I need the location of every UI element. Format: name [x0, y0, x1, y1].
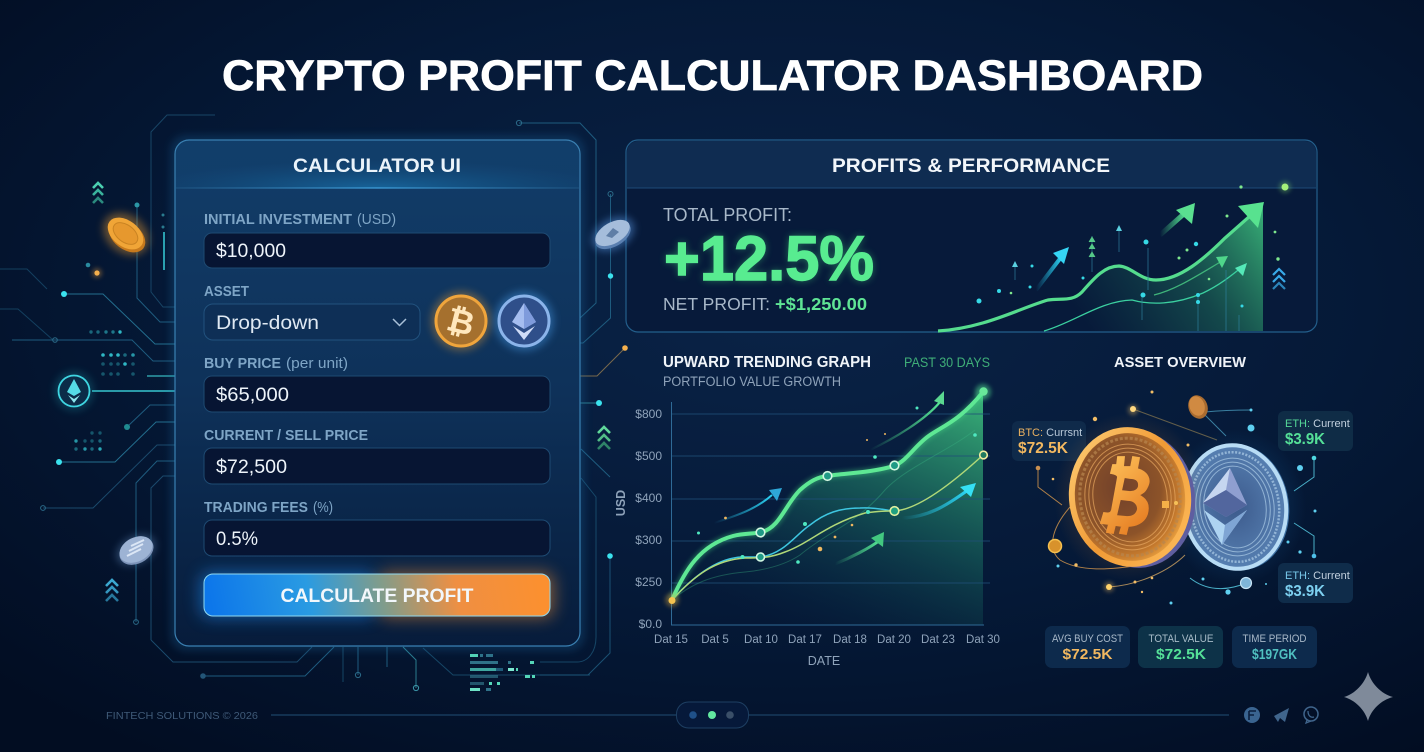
icon: small coin	[1185, 392, 1211, 422]
icon: large bitcoin coin	[1054, 413, 1206, 581]
x axis title: DATE	[808, 654, 840, 668]
field: buy price: (per unit)	[286, 356, 348, 372]
callout: BTC current	[1012, 421, 1086, 461]
x axis labels: Dat 23	[921, 634, 955, 646]
net profit: NET PROFIT:	[663, 294, 770, 314]
x axis labels: Dat 30	[966, 634, 1000, 646]
field: current / sell price: $72,500	[216, 457, 287, 478]
chart area fill	[672, 392, 983, 625]
stat card: total value: TOTAL VALUE	[1148, 633, 1214, 645]
panel header: calculator: CALCULATOR UI	[293, 155, 461, 177]
icon: bitcoin badge: ₿	[443, 300, 478, 343]
field: trading fees: (%)	[313, 500, 333, 516]
series: blue curve	[672, 508, 894, 600]
y axis labels: $0.0	[639, 617, 662, 631]
field: current / sell price: CURRENT / SELL PRICE	[204, 428, 368, 444]
net profit: +$1,250.00	[775, 294, 867, 314]
callout: ETH current blue	[1278, 563, 1353, 603]
icon: sparkle watermark	[1344, 672, 1393, 721]
circuit nodes and dots	[41, 120, 628, 691]
panel header: profits: PROFITS & PERFORMANCE	[832, 155, 1110, 177]
field: initial investment	[204, 212, 550, 268]
field: current / sell price	[204, 428, 550, 484]
field: trading fees	[204, 500, 550, 556]
panel header: calculator	[176, 141, 579, 188]
chart heading: UPWARD TRENDING GRAPH	[663, 354, 871, 371]
y axis title: USD	[614, 490, 628, 516]
icon: gold coin	[95, 204, 157, 264]
chart heading	[663, 354, 990, 389]
x axis labels: Dat 20	[877, 634, 911, 646]
field: asset drop-down: Drop-down	[216, 313, 319, 334]
panel: calculator UI	[170, 135, 585, 651]
data bars	[470, 654, 535, 691]
callout: BTC current: BTC: Currsnt	[1018, 427, 1082, 439]
chart heading: PORTFOLIO VALUE GROWTH	[663, 374, 841, 389]
line chart: portfolio value	[614, 384, 1000, 668]
field: asset drop-down	[204, 284, 420, 340]
stat card: time period	[1232, 626, 1317, 668]
field: trading fees: TRADING FEES	[204, 500, 308, 516]
stat card: avg buy cost: $72.5K	[1062, 646, 1113, 663]
stat card: total value	[1138, 626, 1223, 668]
stat card: total value: $72.5K	[1156, 646, 1206, 663]
social icons	[1244, 707, 1318, 723]
x axis labels: Dat 18	[833, 634, 867, 646]
total profit value: +12.5%	[664, 224, 874, 294]
field: initial investment: $10,000	[216, 241, 286, 262]
icon: silver coin right	[586, 210, 640, 258]
x axis labels	[654, 634, 1000, 646]
total profit value: +12.5%	[664, 224, 874, 294]
x axis labels: Dat 17	[788, 634, 822, 646]
circuit traces: right	[519, 123, 625, 675]
callout: ETH current green	[1278, 411, 1353, 451]
icon: large ethereum coin	[1166, 429, 1306, 585]
dot matrices	[74, 330, 135, 451]
y axis labels	[635, 407, 662, 631]
panel: profits and performance	[626, 140, 1317, 332]
chart data points	[665, 384, 991, 607]
callout: BTC current: $72.5K	[1018, 440, 1069, 457]
y axis labels: $250	[635, 575, 662, 589]
series: main green curve	[672, 392, 983, 600]
icon: ethereum badge	[494, 291, 554, 351]
callout: ETH current blue: $3.9K	[1285, 583, 1326, 600]
chevrons	[93, 183, 610, 601]
chart heading: PAST 30 DAYS	[904, 355, 990, 370]
stat card: time period: $197GK	[1252, 646, 1297, 663]
grid lines	[672, 414, 990, 583]
performance chart	[938, 181, 1291, 331]
field: initial investment: (USD)	[357, 212, 396, 228]
total profit label: TOTAL PROFIT:	[663, 205, 792, 225]
net profit	[663, 294, 867, 314]
y axis labels: $500	[635, 449, 662, 463]
button: calculate profit: CALCULATE PROFIT	[280, 586, 474, 607]
field: buy price	[204, 356, 550, 412]
callout: ETH current green: $3.9K	[1285, 431, 1326, 448]
field: asset drop-down: ASSET	[204, 284, 249, 300]
stat card: avg buy cost: AVG BUY COST	[1052, 633, 1123, 645]
pagination dots	[676, 702, 748, 728]
x axis labels: Dat 10	[744, 634, 778, 646]
icon: ethereum node	[54, 371, 94, 411]
footer	[106, 702, 1318, 728]
axes	[672, 402, 984, 625]
icon: bitcoin badge	[431, 291, 491, 351]
stat card: avg buy cost	[1045, 626, 1130, 668]
x axis labels: Dat 5	[701, 634, 729, 646]
panel: asset overview	[1012, 354, 1353, 668]
field: buy price: BUY PRICE	[204, 356, 281, 372]
field: trading fees: 0.5%	[216, 529, 258, 550]
field: buy price: $65,000	[216, 385, 289, 406]
panel header: profits	[627, 141, 1316, 188]
x axis labels: Dat 15	[654, 634, 688, 646]
circuit traces: left	[0, 115, 590, 688]
y axis labels: $300	[635, 533, 662, 547]
callout: ETH current blue: ETH: Current	[1285, 570, 1350, 582]
field: initial investment: INITIAL INVESTMENT	[204, 212, 352, 228]
series: faint curve	[672, 430, 975, 600]
chart trend arrows	[714, 391, 976, 564]
y axis labels: $400	[635, 491, 662, 505]
asset overview heading: ASSET OVERVIEW	[1114, 354, 1247, 371]
orbit lines and particles	[1036, 390, 1316, 604]
icon: silver coin left	[111, 528, 161, 572]
series: yellow curve	[672, 455, 983, 600]
title: CRYPTO PROFIT CALCULATOR DASHBOARD	[222, 52, 1203, 100]
button: calculate profit	[200, 572, 554, 618]
stat card: time period: TIME PERIOD	[1242, 633, 1307, 645]
footer credit: FINTECH SOLUTIONS © 2026	[106, 710, 258, 722]
y axis labels: $800	[635, 407, 662, 421]
callout: ETH current green: ETH: Current	[1285, 418, 1350, 430]
